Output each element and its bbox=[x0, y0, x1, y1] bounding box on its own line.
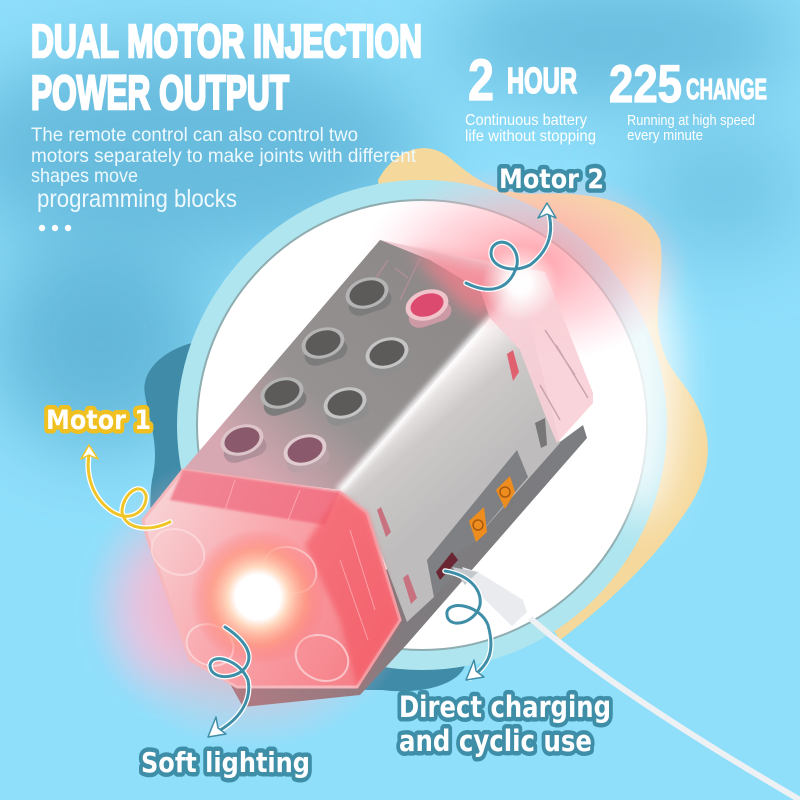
side face bbox=[340, 285, 560, 622]
studs bbox=[216, 272, 454, 476]
front upper band bbox=[170, 470, 340, 525]
side highlight bbox=[340, 302, 505, 490]
label: soft lighting: Soft lighting bbox=[141, 746, 310, 779]
device bbox=[143, 240, 593, 707]
button: power bbox=[469, 507, 487, 542]
title: POWER OUTPUT bbox=[31, 67, 289, 120]
arrow: charging bbox=[445, 571, 491, 680]
rear end red tint bbox=[410, 250, 520, 320]
description text: programming blocks bbox=[37, 185, 237, 213]
description text: motors separately to make joints with different bbox=[31, 146, 417, 167]
top face bbox=[183, 240, 520, 490]
usb port bbox=[436, 552, 458, 580]
slots bbox=[377, 350, 547, 604]
stat: 225 change: Running at high speed bbox=[627, 112, 755, 129]
front right band bbox=[305, 492, 400, 687]
stat: 225 change bbox=[609, 55, 767, 144]
stat: 225 change: every minute bbox=[627, 127, 703, 144]
stat: 2 hour: life without stopping bbox=[465, 128, 596, 145]
title bbox=[31, 15, 422, 120]
label: direct charging bbox=[399, 690, 611, 758]
arrow: soft lighting bbox=[208, 627, 249, 737]
label: direct charging: Direct charging bbox=[399, 690, 611, 724]
stat: 2 hour: Continuous battery bbox=[465, 112, 587, 129]
rear lamp glow bbox=[482, 245, 558, 321]
description text: The remote control can also control two bbox=[31, 125, 358, 146]
lilac glow bbox=[115, 540, 215, 680]
yellow blob bbox=[378, 148, 708, 640]
device underside bbox=[228, 425, 587, 707]
stat: 2 hour: HOUR bbox=[507, 60, 577, 101]
circle: outer ring bbox=[177, 180, 667, 670]
label: motor 1: Motor 1 bbox=[46, 405, 151, 436]
circle: white disc bbox=[197, 200, 647, 650]
front pink glow bbox=[85, 450, 415, 750]
front detail lines bbox=[225, 480, 375, 640]
rear transparent end bbox=[380, 240, 593, 443]
description text: shapes move bbox=[31, 166, 138, 187]
button: mode bbox=[496, 476, 515, 509]
stat: 225 change: 225 bbox=[609, 55, 682, 114]
label: direct charging: and cyclic use bbox=[399, 724, 592, 758]
ellipsis dots bbox=[39, 225, 71, 231]
top-right pink glow bbox=[360, 165, 690, 365]
stat: 2 hour: 2 bbox=[468, 48, 494, 113]
arrow: motor 1 bbox=[81, 445, 170, 528]
title: DUAL MOTOR INJECTION bbox=[31, 15, 422, 67]
front lamp glow bbox=[190, 529, 326, 665]
dark teal blob bbox=[144, 343, 466, 691]
right side white haze bbox=[602, 260, 678, 520]
label: motor 2: Motor 2 bbox=[499, 164, 604, 195]
description text bbox=[31, 125, 417, 213]
lens rings bbox=[144, 521, 356, 689]
stat: 2 hour bbox=[465, 48, 596, 145]
charging cable bbox=[452, 567, 800, 800]
rear transparent detail bbox=[368, 258, 588, 420]
front transparent end bbox=[143, 470, 400, 687]
control panel bbox=[427, 450, 528, 597]
arrow: motor 2 bbox=[466, 203, 556, 289]
